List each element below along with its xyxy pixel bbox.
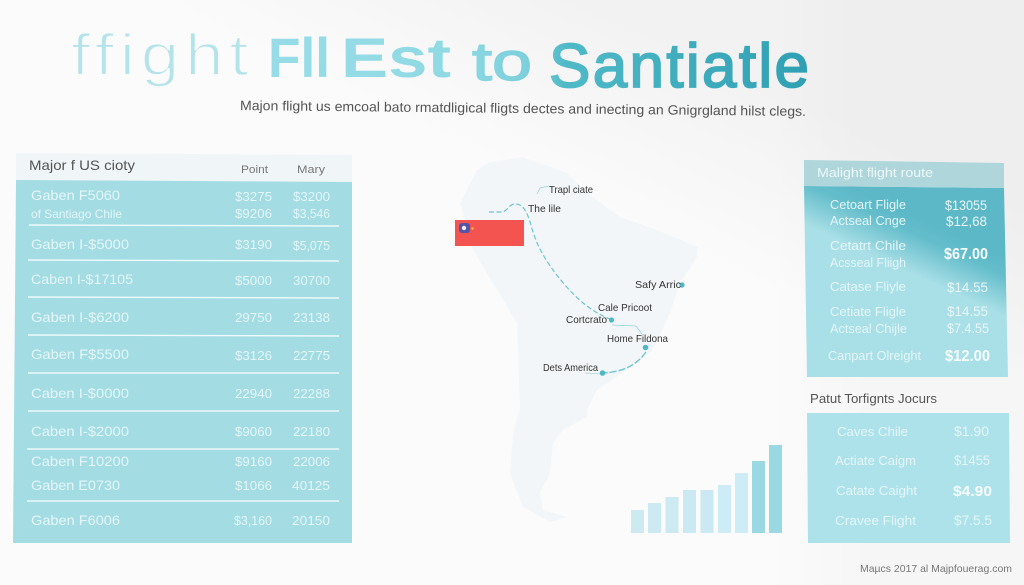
table rows: Gaben E0730 xyxy=(31,477,120,493)
panel body xyxy=(807,413,1010,543)
rows: Catate Caight xyxy=(836,484,918,498)
map labels: Dets America xyxy=(543,362,598,374)
title: ffight xyxy=(71,22,249,88)
column: point: 29750 xyxy=(235,311,272,325)
column: mary: 22180 xyxy=(293,425,330,439)
route prices: $14.55 xyxy=(947,280,988,295)
table header xyxy=(16,153,352,182)
map labels: Home Fildona xyxy=(607,333,668,345)
route prices xyxy=(944,198,990,365)
route rows: Actseal Chijle xyxy=(830,322,907,336)
column: point: 22940 xyxy=(235,387,272,401)
rows: Actiate Caigm xyxy=(835,454,916,468)
title xyxy=(71,22,809,101)
table rows: Caben F10200 xyxy=(31,453,129,469)
title: Fll xyxy=(268,26,330,89)
panel header: Malight flight route xyxy=(817,165,933,180)
rows xyxy=(835,424,992,528)
route rows: Cetiate Fligle xyxy=(830,305,906,319)
column: mary: 20150 xyxy=(292,514,330,528)
route rows xyxy=(828,198,922,363)
column: point: $9060 xyxy=(235,425,272,439)
rows: $7.5.5 xyxy=(954,513,992,528)
route rows: Cetoart Fligle xyxy=(830,198,906,212)
table rows: Gaben F$5500 xyxy=(31,346,129,362)
panel body xyxy=(804,186,1008,377)
flight route xyxy=(489,186,646,374)
column: mary: 22775 xyxy=(293,349,330,363)
map labels: Cortcrato xyxy=(566,314,607,326)
table rows: Gaben I-$5000 xyxy=(31,236,129,252)
map of South America xyxy=(455,157,698,522)
column: point: $9206 xyxy=(235,207,272,221)
subtitle: Majon flight us emcoal bato rmatdligical fligts dectes and inecting an Gnigrgland hilst clegs. xyxy=(240,98,806,119)
column: mary: 23138 xyxy=(293,311,330,325)
column: point: $1066 xyxy=(235,479,272,493)
title: Est xyxy=(341,26,451,89)
column: mary: 30700 xyxy=(293,274,330,288)
route rows: Catase Fliyle xyxy=(830,280,906,294)
map labels: The lile xyxy=(528,203,561,215)
title: to xyxy=(472,32,532,92)
heading: Patut Torfignts Jocurs xyxy=(810,391,938,406)
rows: $4.90 xyxy=(953,483,992,500)
column: point: $5000 xyxy=(235,274,272,288)
rows: Caves Chile xyxy=(837,425,908,439)
column: mary: 40125 xyxy=(292,479,330,493)
panel: major US city table xyxy=(13,153,352,543)
rows: Cravee Flight xyxy=(835,514,917,528)
map labels xyxy=(528,184,681,374)
column: point: $3,160 xyxy=(234,514,272,528)
table header: Mary xyxy=(297,164,326,176)
route rows: Cetatrt Chile xyxy=(830,239,906,253)
column: point: $3126 xyxy=(235,349,272,363)
panel: top flights hours xyxy=(807,391,1010,543)
route rows: Canpart Olreight xyxy=(828,349,922,363)
table rows: Gaben I-$6200 xyxy=(31,309,129,325)
rows: $1455 xyxy=(954,453,990,468)
route stops xyxy=(600,282,685,376)
footer source: Maµcs 2017 al Majpfouerag.com xyxy=(860,563,1012,575)
table rows: Gaben F5060 xyxy=(31,187,120,203)
column: mary: $5,075 xyxy=(293,239,330,253)
route rows: Acsseal Fliigh xyxy=(830,256,906,270)
route prices: $12,68 xyxy=(946,214,987,229)
flag marker xyxy=(455,220,524,246)
route prices: $12.00 xyxy=(945,348,990,365)
table rows xyxy=(31,187,133,528)
column: point xyxy=(234,190,272,528)
continent shape xyxy=(460,157,698,522)
map labels: Safy Arric xyxy=(635,279,681,291)
row dividers xyxy=(27,225,339,501)
column: point: $3190 xyxy=(235,238,272,252)
column: mary: 22288 xyxy=(293,387,330,401)
route prices: $67.00 xyxy=(944,246,988,263)
table rows: Caben I-$2000 xyxy=(31,423,129,439)
column: point: $9160 xyxy=(235,455,272,469)
route rows: Actseal Cnge xyxy=(830,214,906,228)
table rows: Gaben F6006 xyxy=(31,512,120,528)
bar chart xyxy=(631,445,782,533)
column: mary xyxy=(292,190,330,528)
title: Santiatle xyxy=(549,32,809,101)
panel: flight route prices xyxy=(804,160,1008,377)
column: mary: $3,546 xyxy=(293,207,330,221)
column: mary: 22006 xyxy=(293,455,330,469)
map labels: Trapl ciate xyxy=(549,184,593,196)
table rows: Caben I-$0000 xyxy=(31,385,129,401)
table header: Point xyxy=(241,164,268,176)
route prices: $13055 xyxy=(945,198,987,213)
rows: $1.90 xyxy=(954,424,989,439)
column: mary: $3200 xyxy=(293,190,330,204)
column: point: $3275 xyxy=(235,190,272,204)
route prices: $14.55 xyxy=(947,304,988,319)
panel header xyxy=(804,160,1004,188)
map labels: Cale Pricoot xyxy=(598,302,652,314)
table rows: Caben I-$17105 xyxy=(31,271,133,287)
route prices: $7.4.55 xyxy=(947,321,989,336)
table header: Major f US cioty xyxy=(29,157,135,173)
table body xyxy=(13,180,352,543)
table rows: of Santiago Chile xyxy=(31,207,122,221)
